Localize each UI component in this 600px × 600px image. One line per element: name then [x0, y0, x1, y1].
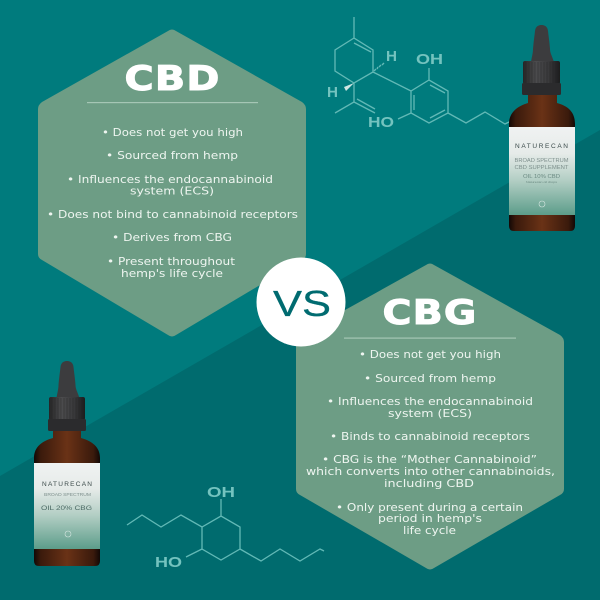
text block: CBG facts: [306, 349, 555, 537]
panel: CBD hexagon: [38, 30, 306, 336]
text block: CBG facts: including CBD: [384, 478, 474, 490]
text block: CBG facts: • Does not get you high: [359, 349, 501, 361]
text block: CBG facts: • Sourced from hemp: [364, 373, 496, 385]
divider: CBD: [87, 102, 258, 103]
product label: CBD: BROAD SPECTRUM: [514, 158, 568, 164]
product label: CBG: OIL 20% CBG: [41, 505, 92, 512]
text block: CBG facts: which converts into other cannabinoids,: [306, 466, 555, 478]
product label: CBD: CBD SUPPLEMENT: [514, 165, 568, 171]
product label: CBG: [34, 463, 100, 549]
text block: CBG facts: • Influences the endocannabinoid: [327, 396, 533, 408]
heading: CBG: CBG: [382, 293, 478, 333]
molecule: CBG structure: OH: [207, 484, 235, 501]
text block: CBD facts: system (ECS): [130, 186, 214, 198]
text block: CBG facts: • Only present during a certain: [336, 502, 523, 514]
product label: CBD: Naturecan oil drops: [526, 180, 558, 184]
molecule: CBG structure: [127, 484, 324, 571]
text block: CBG facts: period in hemp's: [378, 513, 482, 525]
text block: CBD facts: • Influences the endocannabinoid: [67, 174, 273, 186]
text block: CBD facts: • Sourced from hemp: [106, 150, 238, 162]
product label: CBD: NATURECAN: [515, 143, 568, 150]
product label: CBG: NATURECAN: [42, 481, 92, 488]
product label: CBG: BROAD SPECTRUM: [44, 492, 91, 497]
text block: CBD facts: • Present throughout: [107, 256, 235, 268]
bottle: CBD oil: [509, 25, 575, 231]
molecule: CBD structure: OH: [416, 51, 443, 68]
molecule: CBD structure: HO: [368, 114, 394, 131]
molecule: CBD structure: [327, 17, 511, 131]
molecule: CBD structure: H: [386, 48, 397, 65]
VS badge: [256, 258, 346, 346]
molecule: CBD structure: H: [327, 84, 338, 101]
molecule: CBG structure: HO: [155, 554, 182, 571]
panel: CBG hexagon: [296, 264, 564, 570]
VS badge: VS: [273, 283, 331, 324]
text block: CBG facts: system (ECS): [388, 408, 472, 420]
text block: CBD facts: • Derives from CBG: [112, 232, 232, 244]
product label: CBD: [509, 127, 575, 215]
text block: CBG facts: • Binds to cannabinoid receptors: [330, 431, 530, 443]
text block: CBG facts: life cycle: [403, 525, 456, 537]
text block: CBD facts: • Does not bind to cannabinoid receptors: [47, 209, 298, 221]
heading: CBD: CBD: [124, 59, 220, 99]
text block: CBD facts: • Does not get you high: [102, 127, 243, 139]
divider: CBG: [344, 338, 516, 339]
text block: CBD facts: [47, 127, 298, 280]
text block: CBD facts: hemp's life cycle: [121, 268, 223, 280]
text block: CBG facts: • CBG is the “Mother Cannabinoid”: [322, 454, 537, 466]
product label: CBD: OIL 10% CBD: [523, 174, 560, 180]
bottle: CBG oil: [34, 361, 100, 566]
